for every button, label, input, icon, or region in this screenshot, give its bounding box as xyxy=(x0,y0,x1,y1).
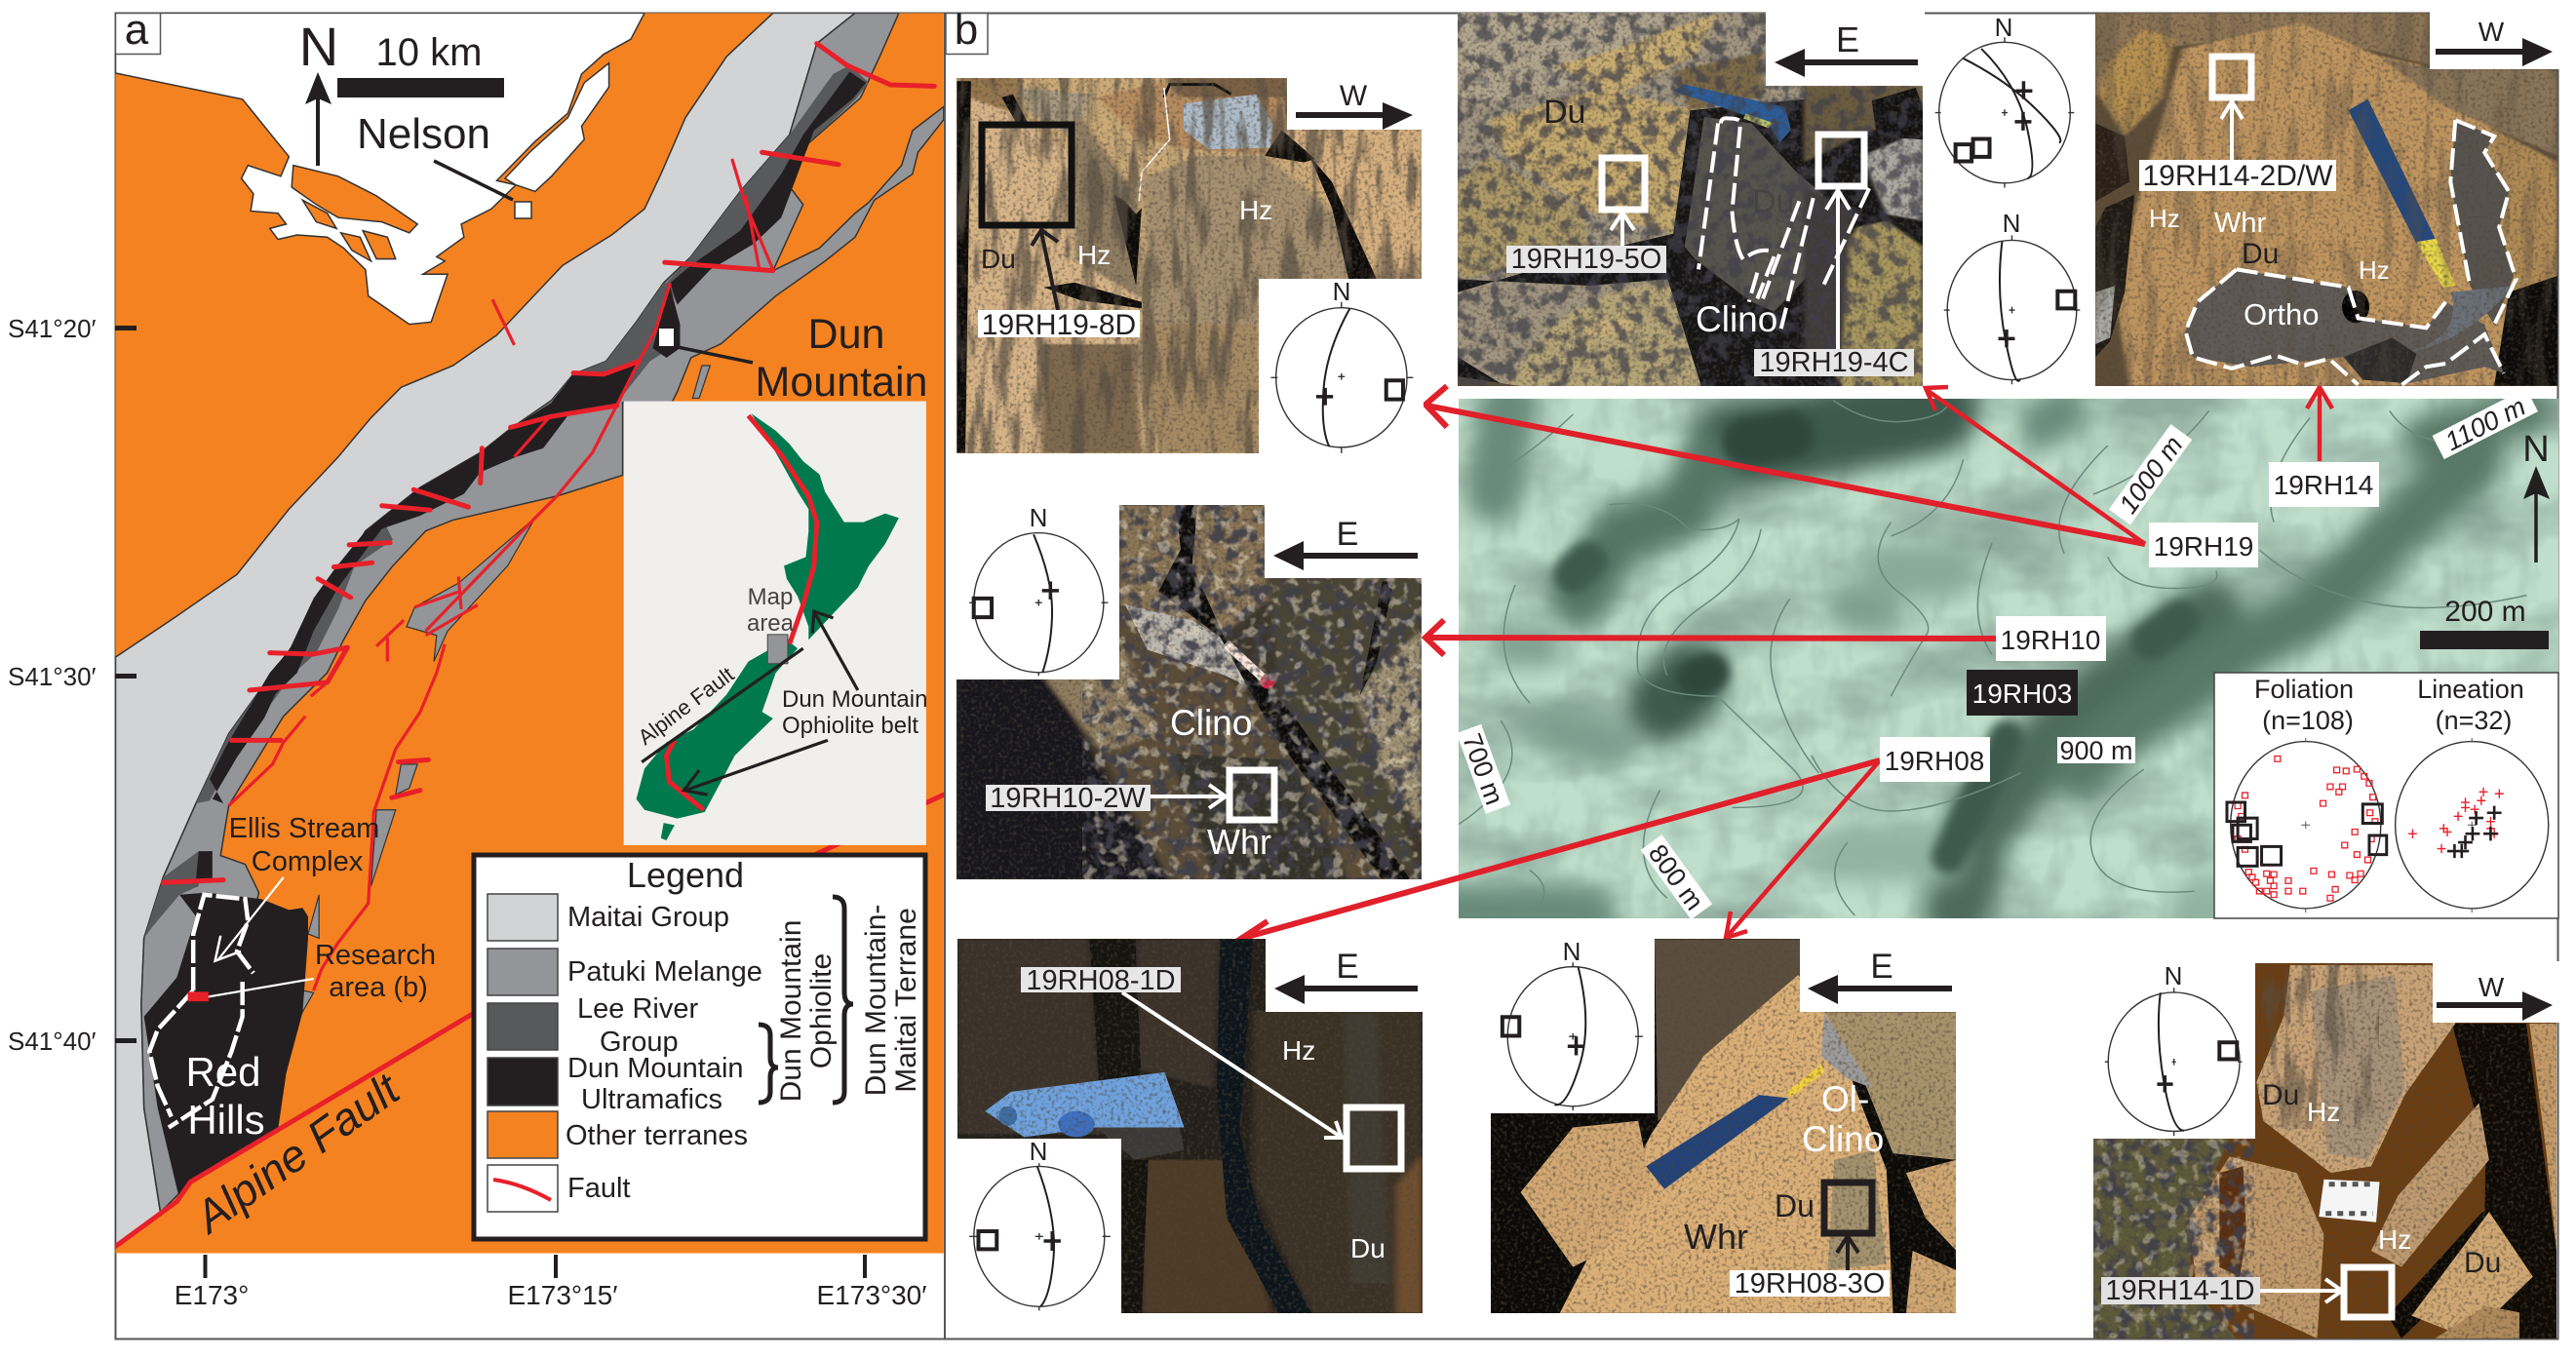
legend xyxy=(474,855,925,1239)
dashed clino vein outlines xyxy=(1698,118,1869,334)
legend swatch: Patuki Melange xyxy=(488,949,558,995)
grey strip xyxy=(2450,120,2514,325)
sample box 19RH08-1D xyxy=(1347,1107,1401,1169)
direction arrow W xyxy=(2433,961,2559,1023)
brace: Dun Mountain Ophiolite: Dun Mountain xyxy=(775,920,807,1102)
label Dun Mountain with locator xyxy=(659,311,927,406)
highlighted lineation samples xyxy=(2447,806,2502,858)
label: Alpine Fault: Alpine Fault xyxy=(183,1062,410,1244)
labels: Ellis Stream Complex: Complex xyxy=(252,846,364,877)
sample label 19RH19-8D: 19RH19-8D xyxy=(982,309,1136,341)
panel b: field photos and terrain map xyxy=(945,6,2559,1339)
inset: New Zealand location map: Dun Mountain xyxy=(782,686,927,713)
map: Boulder Bank lagoon xyxy=(505,63,609,191)
elevation label 1100 m: 1100 m xyxy=(2440,392,2530,456)
inset: New Zealand location map: Ophiolite belt xyxy=(782,713,918,739)
red arrow 19RH19 to photo 8D xyxy=(1425,386,2145,544)
pointer 19RH14-2D/W xyxy=(2221,101,2243,160)
lithology labels: Clino xyxy=(1170,703,1252,743)
photo: 19RH19-5O and 4C xyxy=(1458,11,1925,386)
legend swatch: Maitai Group xyxy=(488,894,558,941)
labels: Research area: area (b) xyxy=(329,972,428,1003)
foliation data points xyxy=(2235,757,2378,901)
direction arrow W: W xyxy=(1340,80,1368,112)
pointer 19RH19-5O xyxy=(1611,213,1634,246)
sample box 19RH10-2W xyxy=(1229,770,1274,820)
lithology labels: Hz xyxy=(2307,1097,2340,1127)
direction arrow E: E xyxy=(1870,948,1893,986)
lithology labels: Ortho xyxy=(2244,297,2320,331)
pointer 19RH14-1D xyxy=(2260,1279,2342,1302)
lithology labels: Du xyxy=(1775,1188,1815,1223)
map: Dun Mountain Ultramafics belt xyxy=(144,72,866,1195)
lineation data points xyxy=(2408,788,2504,853)
sample box 19RH19-4C xyxy=(1818,135,1864,186)
legend text entries: Dun Mountain xyxy=(567,1053,744,1084)
sample site labels xyxy=(1880,462,2379,782)
Stewart Island xyxy=(661,823,675,840)
legend text entries: Maitai Group xyxy=(567,902,729,933)
sample label 19RH14-2D/W: 19RH14-2D/W xyxy=(2142,160,2333,192)
label: Red Hills: Hills xyxy=(187,1097,265,1143)
map: sea xyxy=(116,13,644,325)
longitude ticks and labels: E173° xyxy=(175,1280,249,1310)
pointer 19RH08-3O xyxy=(1837,1236,1858,1270)
pointer to sample box xyxy=(1032,230,1058,310)
map: estuary islands xyxy=(292,166,417,261)
latitude ticks and labels: S41°30′ xyxy=(8,662,97,691)
stereonet 19RH10-2W xyxy=(955,503,1119,679)
elevation label 900 m: 900 m xyxy=(2059,736,2133,765)
sample box 19RH14-2D/W xyxy=(2212,57,2251,97)
direction arrow E xyxy=(1266,937,1425,1012)
lithology labels: Du xyxy=(2464,1247,2501,1279)
South Island xyxy=(637,640,798,819)
stereonet 19RH19-8D xyxy=(1259,277,1424,455)
labels: Ellis Stream Complex: Ellis Stream xyxy=(229,813,379,844)
legend text entries: Group xyxy=(600,1027,679,1058)
sample label 19RH08-3O: 19RH08-3O xyxy=(1735,1268,1885,1300)
lithology labels xyxy=(2149,204,2390,331)
brace: Dun Mountain-Maitai Terrane: Dun Mountain- xyxy=(860,905,892,1096)
sample box 19RH08-3O xyxy=(1824,1183,1872,1233)
lithology labels: Hz xyxy=(2149,204,2180,233)
Alpine Fault line xyxy=(642,648,803,762)
label: Red Hills: Red xyxy=(185,1049,261,1095)
direction arrow E xyxy=(1766,11,1925,86)
photo: 19RH14-2D/W xyxy=(2095,11,2559,386)
panel label b: b xyxy=(955,6,978,54)
longitude ticks and labels: E173°30′ xyxy=(817,1280,926,1310)
hammer xyxy=(1673,85,1791,143)
inset: New Zealand location map: Map xyxy=(748,584,793,610)
elevation label 1000 m: 1000 m xyxy=(2113,431,2189,519)
panel label a xyxy=(115,6,160,55)
map: Lee River Group xyxy=(144,65,869,938)
sample label 19RH08-1D: 19RH08-1D xyxy=(1026,965,1176,996)
scale bar 200 m: 200 m xyxy=(2444,596,2526,628)
lithology labels: Du xyxy=(2262,1079,2299,1111)
legend text entries: Ultramafics xyxy=(581,1084,722,1115)
label Nelson with locator: Nelson xyxy=(357,110,490,158)
red arrow 19RH14 to photo xyxy=(2307,387,2332,461)
highlighted foliation samples xyxy=(2227,802,2387,866)
legend swatch: Dun Mountain Ultramafics xyxy=(488,1058,558,1106)
foliation net xyxy=(2231,742,2381,909)
map: other terranes background xyxy=(116,13,944,1254)
terrain map xyxy=(1239,386,2558,953)
stereonet inset: foliation and lineation: Lineation xyxy=(2417,675,2524,704)
label Dun Mountain with locator: Dun xyxy=(808,311,884,358)
red-white pen xyxy=(1226,643,1268,682)
ruler compass xyxy=(1096,1117,1185,1160)
label Nelson with locator xyxy=(357,110,531,218)
inset: New Zealand location map: Alpine Fault xyxy=(634,662,738,750)
direction arrow W xyxy=(2430,11,2559,69)
lithology labels: Du xyxy=(1350,1233,1386,1263)
lithology labels: Ol- xyxy=(1821,1079,1869,1119)
map: Maitai Group xyxy=(116,13,855,1246)
legend text entries: Lee River xyxy=(577,993,698,1025)
hillshade ridges xyxy=(1458,404,2527,915)
north arrow xyxy=(299,16,338,166)
lithology labels: Clino xyxy=(1696,299,1777,339)
longitude ticks and labels xyxy=(175,1255,926,1310)
stereonet 19RH08-1D xyxy=(956,1137,1121,1315)
legend text entries: Patuki Melange xyxy=(567,956,762,988)
red arrow 19RH08 to photo 3O xyxy=(1726,760,1880,938)
photo: 19RH14-1D xyxy=(2091,961,2559,1339)
sample label 19RH10-2W: 19RH10-2W xyxy=(990,783,1146,814)
stereonet 19RH10-2W: N xyxy=(1030,503,1047,532)
panel label a: a xyxy=(125,6,149,54)
stereonet 19RH08-1D: N xyxy=(1030,1137,1047,1166)
label Dun Mountain with locator: Mountain xyxy=(756,359,927,406)
lithology labels: Du xyxy=(981,244,1016,274)
map area box xyxy=(767,635,788,664)
legend text entries xyxy=(566,902,762,1204)
brace: Dun Mountain Ophiolite xyxy=(759,920,838,1103)
sample site labels: 19RH19 xyxy=(2154,531,2253,562)
stereonet inset: foliation and lineation xyxy=(2214,673,2558,918)
north arrow: N xyxy=(299,16,338,77)
legend text entries: Fault xyxy=(567,1173,630,1204)
sample label 19RH19-4C: 19RH19-4C xyxy=(1759,347,1909,378)
pointer 19RH10-2W xyxy=(1151,785,1226,808)
Alpine Fault xyxy=(116,795,944,1246)
compass on rock xyxy=(1184,95,1273,149)
map: fault traces xyxy=(116,44,944,1246)
lithology labels: Hz xyxy=(1282,1035,1315,1066)
red arrow 19RH10 to photo xyxy=(1425,620,1996,655)
brace: Dun Mountain-Maitai Terrane xyxy=(833,897,922,1103)
sample site labels: 19RH10 xyxy=(2001,625,2100,655)
latitude ticks and labels xyxy=(8,314,137,1056)
lithology labels xyxy=(1684,1079,1884,1257)
brace: Dun Mountain-Maitai Terrane: Maitai Terrane xyxy=(890,908,922,1093)
photo: 19RH08-3O xyxy=(1489,937,1958,1313)
lithology labels: Whr xyxy=(1684,1217,1748,1257)
north arrow on terrain map xyxy=(2522,429,2550,563)
scale bar 10 km: 10 km xyxy=(376,31,482,74)
sample label 19RH19-5O: 19RH19-5O xyxy=(1511,244,1661,275)
direction arrow E xyxy=(1265,503,1424,578)
hammer xyxy=(2349,99,2436,244)
arrows xyxy=(815,613,858,690)
lithology labels: Hz xyxy=(2359,255,2390,285)
red arrow 19RH19 to photo 5O and 4C xyxy=(1926,387,2145,544)
sample site labels: 19RH14 xyxy=(2274,470,2373,500)
sample box 19RH19-8D xyxy=(982,125,1072,225)
legend: Legend xyxy=(627,855,744,895)
label: Red Hills xyxy=(185,1049,265,1143)
photo: 19RH10-2W xyxy=(955,503,1424,879)
legend swatch: Lee River Group xyxy=(488,1003,558,1050)
lithology labels xyxy=(1282,1035,1386,1263)
scale bar 10 km xyxy=(337,31,504,97)
stereonet 19RH14-1D xyxy=(2091,961,2255,1139)
inset: New Zealand location map xyxy=(624,402,927,845)
sample site labels: 19RH03 xyxy=(1972,679,2072,709)
photo: 19RH08-1D xyxy=(956,937,1425,1315)
lithology labels: Du xyxy=(2242,238,2279,270)
lithology labels: Hz xyxy=(1239,195,1272,225)
sample box 19RH14-1D xyxy=(2344,1267,2392,1317)
legend swatch: Other terranes xyxy=(488,1111,558,1158)
lithology labels: Clino xyxy=(1802,1119,1884,1159)
direction arrow E: E xyxy=(1337,516,1358,553)
north arrow on terrain map: N xyxy=(2522,429,2550,470)
red arrow 19RH08 to photo 1D xyxy=(1239,760,1880,953)
map: research area outline and pointer xyxy=(149,877,314,1128)
direction arrow E: E xyxy=(1836,19,1859,59)
net ticks xyxy=(2301,738,2477,912)
belt trace xyxy=(749,415,817,644)
stereonet 19RH14-1D: N xyxy=(2165,961,2182,990)
lithology labels: Whr xyxy=(1207,822,1271,862)
lithology labels: Hz xyxy=(2378,1224,2411,1255)
lithology labels: Whr xyxy=(2214,208,2266,239)
legend text entries: Other terranes xyxy=(566,1120,748,1151)
North Island xyxy=(751,413,899,640)
divider between panels xyxy=(944,13,946,1339)
hammer xyxy=(1821,1014,1873,1088)
dashed ortho outlines xyxy=(2186,120,2517,385)
stereonet inset: foliation and lineation: (n=108) xyxy=(2262,706,2354,735)
lineation net xyxy=(2396,742,2549,909)
rock faces and cracks xyxy=(956,78,1422,453)
stereonet 19RH08-3O: N xyxy=(1563,937,1581,966)
stereonet 19RH19 lower: N xyxy=(2003,209,2020,238)
labels: Research area xyxy=(315,940,436,1003)
inset: New Zealand location map: area xyxy=(747,610,795,637)
scale bar 200 m xyxy=(2420,596,2549,649)
contour lines xyxy=(1458,401,2527,915)
labels: Research area: Research xyxy=(315,940,436,971)
elevation label 800 m: 800 m xyxy=(1643,839,1709,915)
latitude ticks and labels: S41°40′ xyxy=(8,1027,97,1056)
direction arrow E xyxy=(1800,937,1958,1012)
lithology labels: Du xyxy=(1543,94,1585,131)
lithology labels xyxy=(1543,94,1794,339)
longitude ticks and labels: E173°15′ xyxy=(508,1280,617,1310)
direction arrow W: W xyxy=(2478,972,2505,1002)
map: small Patuki slivers xyxy=(300,366,710,1017)
stereonet 19RH19-8D: N xyxy=(1333,277,1350,306)
stereonet 19RH19-4C/5O upper xyxy=(1935,13,2074,187)
sample box 19RH19-5O xyxy=(1602,158,1645,210)
sample label 19RH14-1D: 19RH14-1D xyxy=(2105,1275,2255,1306)
pointer 19RH19-4C xyxy=(1826,190,1850,349)
stereonet 19RH08-3O xyxy=(1489,937,1655,1113)
sample site labels: 19RH08 xyxy=(1885,746,1984,776)
direction arrow W xyxy=(1287,76,1424,130)
direction arrow W: W xyxy=(2478,17,2505,47)
photo: 19RH19-8D xyxy=(956,76,1424,455)
panel label b xyxy=(946,6,988,55)
lithology labels xyxy=(2262,1079,2501,1279)
stereonet inset: foliation and lineation: (n=32) xyxy=(2436,706,2512,735)
panel a: geological map xyxy=(8,6,944,1310)
lithology labels xyxy=(981,195,1272,274)
latitude ticks and labels: S41°20′ xyxy=(8,314,97,343)
pointer 19RH08-1D xyxy=(1122,992,1342,1138)
stereonet 19RH19-4C/5O upper: N xyxy=(1995,13,2012,42)
lithology labels xyxy=(1170,703,1271,862)
lithology labels: Hz xyxy=(1077,240,1111,270)
labels: Ellis Stream Complex xyxy=(229,813,379,877)
elevation label 700 m: 700 m xyxy=(1457,730,1509,808)
brace: Dun Mountain Ophiolite: Ophiolite xyxy=(805,953,838,1068)
direction arrow E: E xyxy=(1336,948,1359,986)
scale card xyxy=(2319,1180,2380,1222)
stereonet 19RH19 lower xyxy=(1944,209,2080,384)
ortho lens xyxy=(2186,269,2504,385)
legend swatch: Fault xyxy=(488,1165,558,1212)
map: Patuki Melange xyxy=(141,13,944,1213)
stereonet inset: foliation and lineation: Foliation xyxy=(2254,675,2354,704)
lithology labels: Du xyxy=(1752,183,1794,220)
